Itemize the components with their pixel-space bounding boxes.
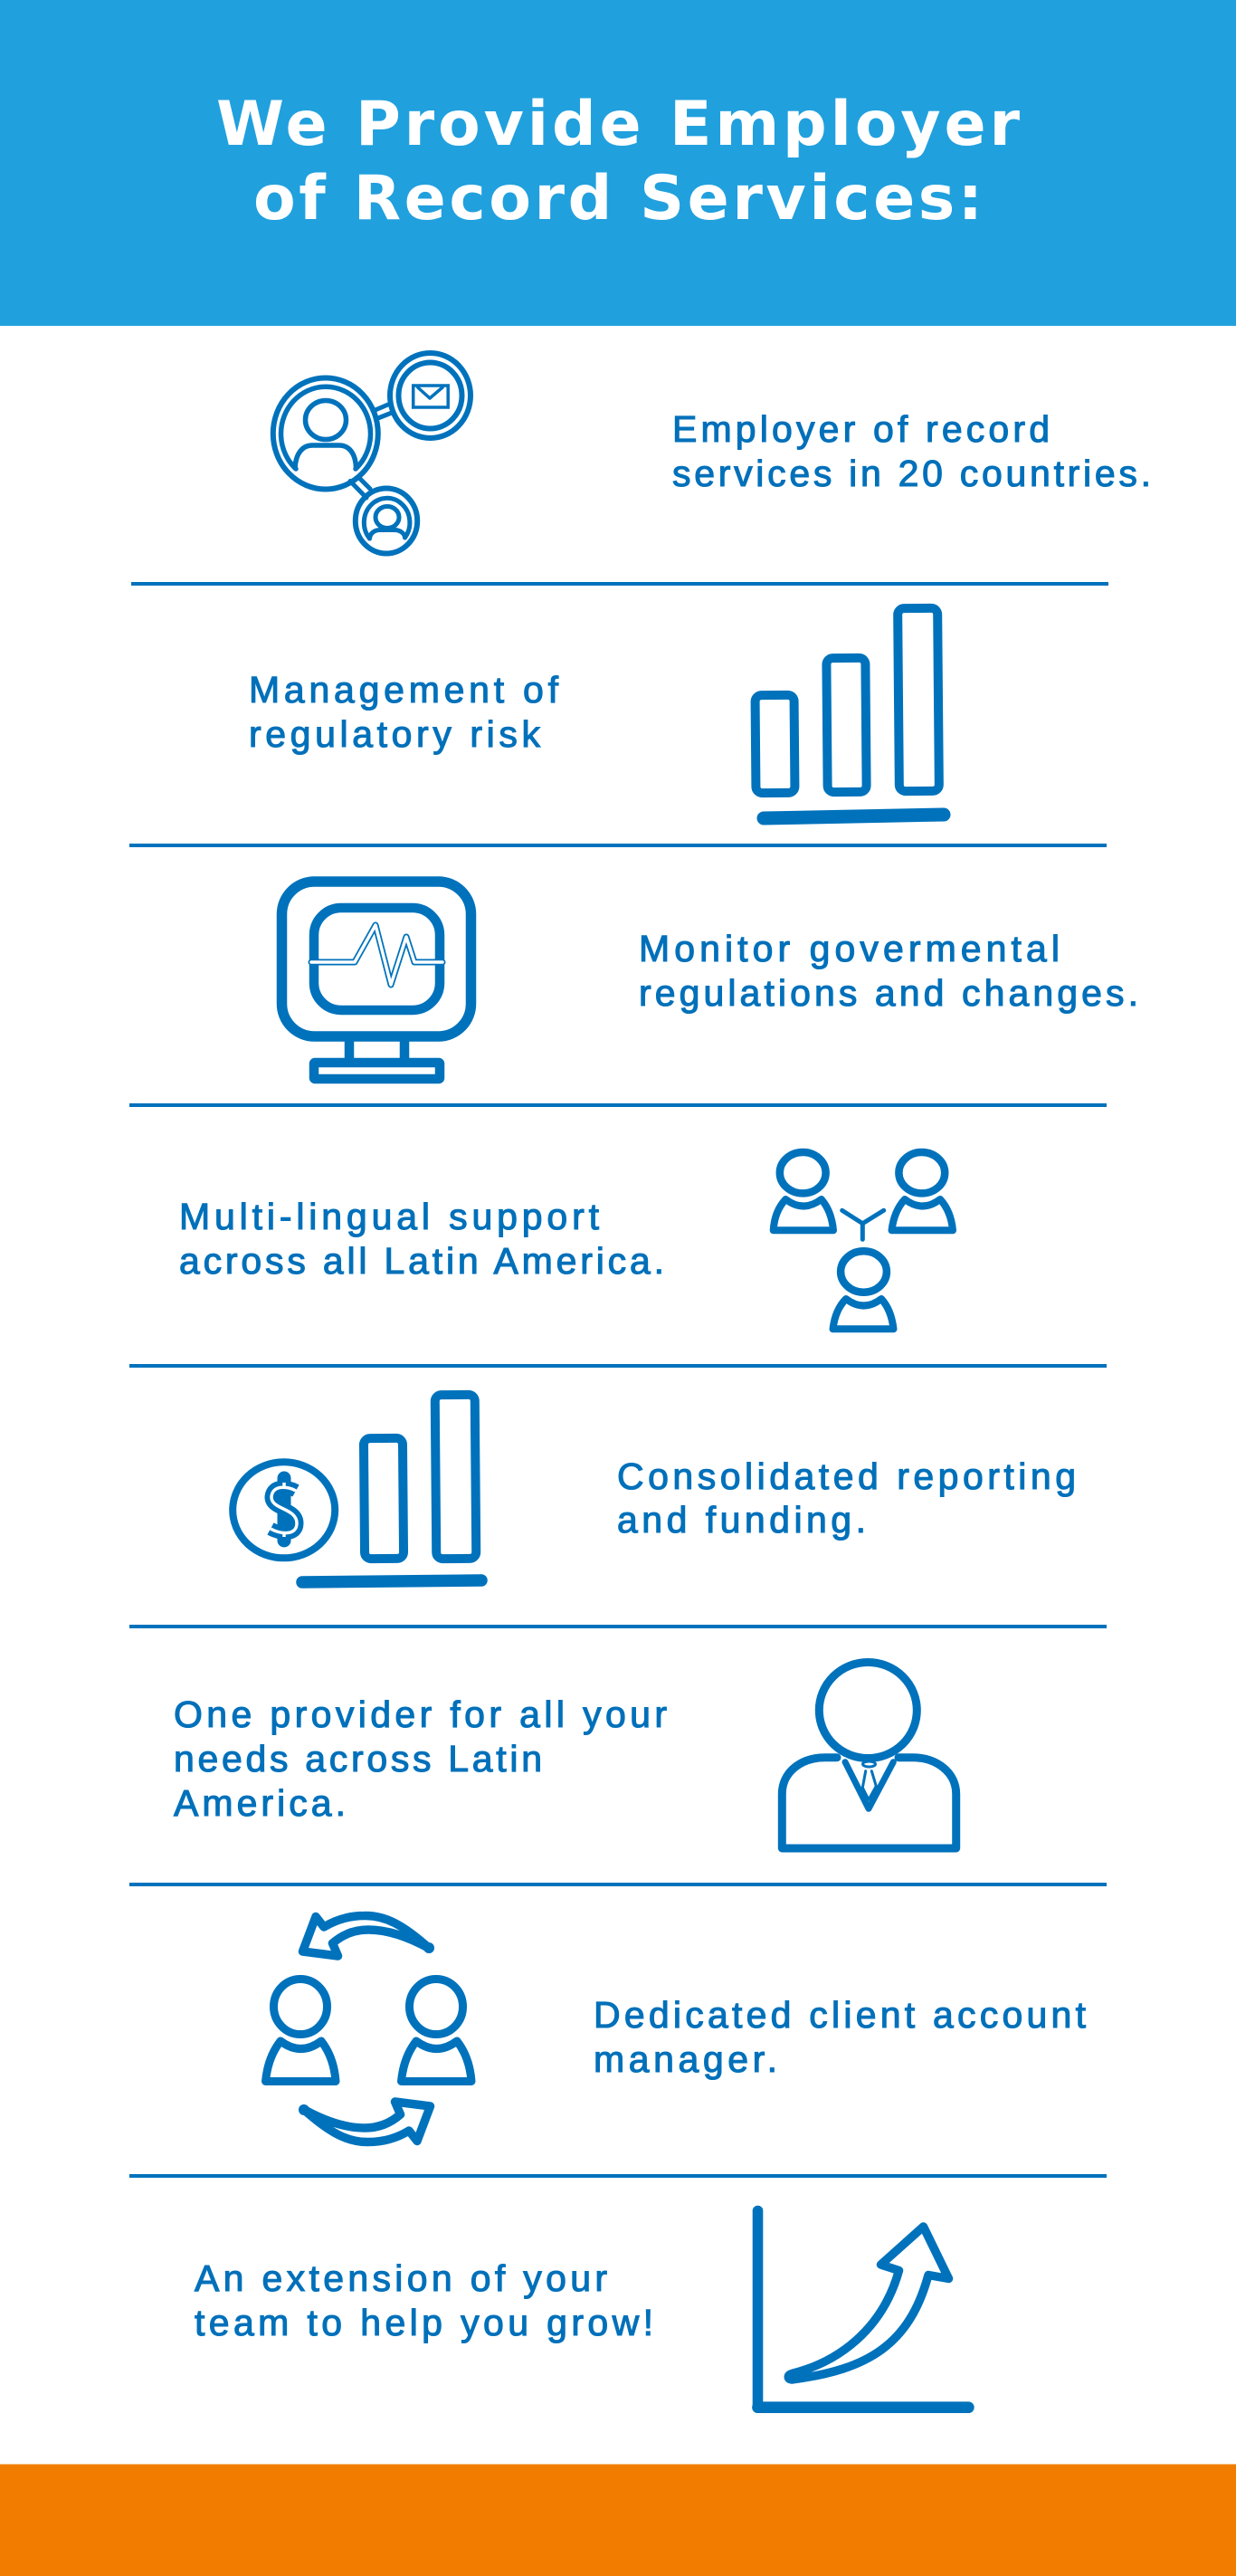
text: regulatory risk: regulatory risk: [249, 713, 541, 755]
text: regulatory risk: [249, 669, 559, 755]
text: one provider: needs across Latin: [174, 1738, 542, 1779]
icon: dollar coin and bars: [233, 1395, 481, 1582]
text: employer of record: services in 20 countries.: [672, 453, 1151, 494]
title: We Provide Employer: [216, 89, 1020, 160]
text: consolidated reporting: and funding.: [617, 1499, 866, 1541]
text: monitor regulations: regulations and changes.: [639, 972, 1138, 1014]
footer band: [0, 2464, 1236, 2576]
text: multi-lingual support: Multi-lingual support: [179, 1196, 600, 1237]
text: one provider: [174, 1693, 667, 1824]
header band: [0, 0, 1236, 326]
text: one provider: One provider for all your: [174, 1693, 667, 1735]
text: dedicated client account manager: Dedicated client account: [594, 1994, 1087, 2036]
text: extension of your team: An extension of your: [195, 2257, 607, 2299]
text: one provider: America.: [174, 1782, 346, 1824]
text: employer of record: [672, 408, 1151, 494]
icon: businessman: [782, 1662, 956, 1848]
text: dedicated client account manager: [594, 1994, 1087, 2080]
title: of Record Services:: [253, 163, 983, 234]
icon: monitor with pulse: [282, 882, 471, 1079]
text: dedicated client account manager: manager.: [594, 2038, 777, 2080]
text: employer of record: Employer of record: [672, 408, 1050, 450]
icon: bar chart: [756, 608, 944, 818]
text: regulatory risk: Management of: [249, 669, 559, 711]
text: monitor regulations: [639, 928, 1138, 1014]
icon: connected people network: [273, 353, 471, 554]
text: extension of your team: [195, 2257, 653, 2343]
title: [216, 89, 1020, 234]
icon: three people: [774, 1152, 953, 1329]
icon: growth chart with arrow: [758, 2210, 968, 2408]
text: consolidated reporting: Consolidated reporting: [617, 1455, 1076, 1497]
text: multi-lingual support: [179, 1196, 664, 1282]
text: multi-lingual support: across all Latin America.: [179, 1240, 664, 1282]
text: monitor regulations: Monitor govermental: [639, 928, 1060, 969]
text: consolidated reporting: [617, 1455, 1076, 1541]
text: extension of your team: team to help you grow!: [195, 2302, 653, 2343]
icon: people exchange with arrows: [266, 1915, 471, 2142]
